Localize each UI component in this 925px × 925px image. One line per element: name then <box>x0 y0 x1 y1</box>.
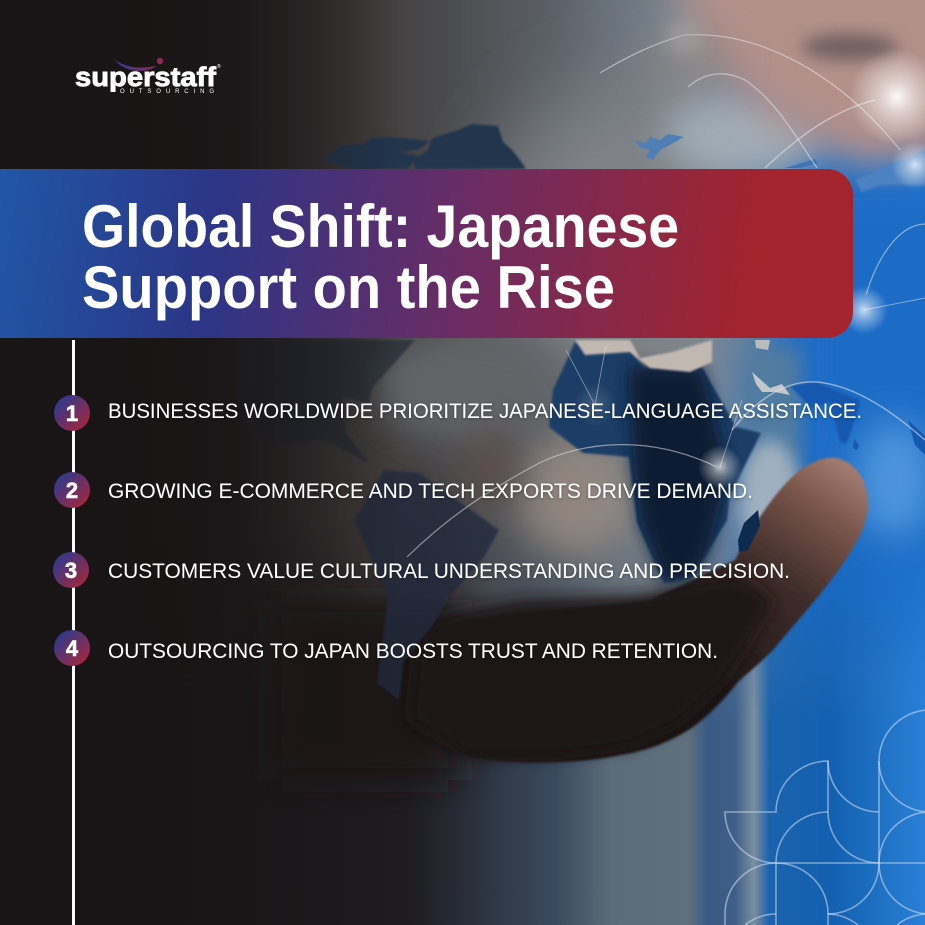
finger and palm edge <box>410 458 868 762</box>
item 2 text: GROWING E-COMMERCE AND TECH EXPORTS DRIVE DEMAND. <box>108 480 753 503</box>
network arcs and glowing nodes <box>407 19 925 557</box>
title text: Global Shift: Japanese <box>82 193 679 260</box>
canadian islands <box>322 137 430 169</box>
logo dot <box>157 58 163 64</box>
soft palm shadow on the left <box>270 600 460 780</box>
item 1 text: BUSINESSES WORLDWIDE PRIORITIZE JAPANESE-LANGUAGE ASSISTANCE. <box>108 400 862 423</box>
number badge 1 <box>54 395 90 431</box>
arabia <box>752 372 790 395</box>
arabian sea and india <box>790 382 860 444</box>
africa <box>549 342 761 583</box>
svalbard <box>635 134 684 160</box>
number badge 3 <box>53 552 89 588</box>
novaya zemlya <box>785 159 818 168</box>
blue shirt <box>800 180 925 660</box>
logo wordmark: superstaff <box>75 62 217 92</box>
russia far coast <box>855 150 925 192</box>
title banner <box>0 169 853 338</box>
number badge 4: 4 <box>66 636 79 661</box>
southeast asia <box>908 420 925 455</box>
title text: Support on the Rise <box>82 254 615 321</box>
dark hand body <box>410 575 775 755</box>
logo: superstaff outsourcing <box>75 58 221 95</box>
logo registered mark: ® <box>217 63 221 70</box>
europe and mediterranean coast <box>575 340 712 372</box>
decorative line pattern bottom right <box>725 710 925 925</box>
number badge 2 <box>54 472 90 508</box>
skin tone blur behind <box>670 0 925 165</box>
logo swoosh <box>114 59 156 71</box>
pale globe highlight <box>490 90 750 390</box>
sri lanka <box>853 439 859 450</box>
item 3 text: CUSTOMERS VALUE CULTURAL UNDERSTANDING AND PRECISION. <box>108 560 790 583</box>
number badge 1: 1 <box>66 401 78 426</box>
lower backdrop strips <box>278 554 925 925</box>
greenland <box>413 124 526 169</box>
banner background <box>0 169 853 338</box>
raised fingers behind the map <box>517 433 633 557</box>
logo tagline: OUTSOURCING <box>120 89 214 95</box>
south america <box>354 470 499 700</box>
madagascar <box>738 510 760 552</box>
number badge 4 <box>54 630 90 666</box>
north america <box>235 340 415 463</box>
background photo: hand touching a world map <box>268 0 925 925</box>
world map continents <box>235 124 925 700</box>
list item 3 <box>53 552 790 588</box>
list item 2 <box>54 472 753 508</box>
list item 4 <box>54 630 718 666</box>
list item 1 <box>54 395 862 431</box>
number badge 3: 3 <box>65 558 77 583</box>
number badge 2: 2 <box>66 478 78 503</box>
dark fade on left <box>0 0 400 925</box>
item 4 text: OUTSOURCING TO JAPAN BOOSTS TRUST AND RETENTION. <box>108 640 718 663</box>
timeline vertical line <box>72 340 75 925</box>
hand and pointing finger <box>270 428 868 780</box>
